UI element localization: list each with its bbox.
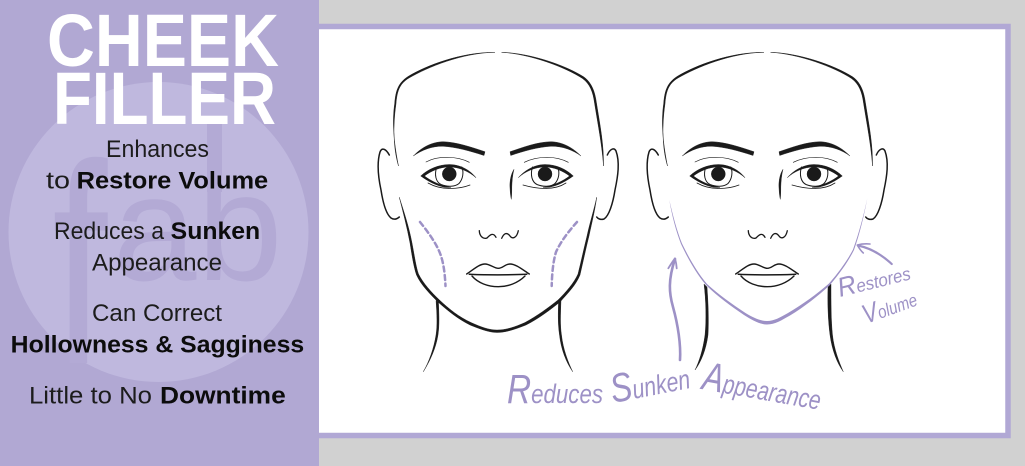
- text: hollowness and sagginess: Can Correct: [92, 300, 222, 327]
- text: sunken appearance: Sunken: [171, 218, 260, 245]
- heading: cheek filler: CHEEK: [47, 0, 279, 82]
- arrow: to sunken area: [668, 258, 680, 360]
- label: restores volume: Restores: [834, 256, 913, 303]
- label: reduces sunken appearance: Sunken: [606, 351, 693, 412]
- text: hollowness and sagginess: Hollowness & Sagginess: [11, 332, 304, 359]
- head outline: [647, 52, 887, 372]
- text: sunken appearance: [54, 218, 260, 277]
- dashed guide: left cheek hollow: [420, 222, 446, 286]
- illustration: face before treatment: [378, 52, 618, 372]
- dashed guide: right cheek hollow: [552, 222, 577, 286]
- eyebrows: [682, 142, 850, 162]
- text: restore volume: Restore Volume: [77, 168, 268, 195]
- head outline: [378, 52, 618, 372]
- text: restore volume: [46, 136, 268, 195]
- lips: [736, 264, 798, 287]
- watermark: fab logo: b: [197, 141, 283, 313]
- label: reduces sunken appearance: Reduces: [507, 366, 603, 412]
- restored jawline: [669, 198, 867, 324]
- text: sunken appearance: Reduces a: [54, 218, 165, 245]
- text: restore volume: Enhances: [106, 136, 209, 163]
- eyes: [690, 164, 842, 188]
- eyebrows: [413, 142, 581, 162]
- text: sunken appearance: Appearance: [92, 250, 222, 277]
- nose: [479, 169, 518, 238]
- panel: illustration frame: [316, 26, 1008, 436]
- lips: [467, 264, 529, 287]
- watermark: fab logo: a: [113, 144, 197, 312]
- text: downtime: [29, 382, 286, 409]
- text: hollowness and sagginess: [11, 300, 304, 359]
- text: downtime: Downtime: [160, 382, 286, 409]
- label: reduces sunken appearance: Appearance: [698, 352, 826, 419]
- label: reduces sunken appearance: [507, 351, 826, 419]
- illustration: face after treatment: [647, 52, 887, 372]
- text: restore volume: to: [46, 168, 70, 195]
- eyes: [421, 164, 573, 188]
- label: restores volume: [834, 256, 921, 330]
- arrow: to restored volume: [857, 244, 892, 264]
- heading: cheek filler: FILLER: [53, 57, 276, 140]
- text: downtime: Little to No: [29, 382, 152, 409]
- heading: cheek filler: [47, 0, 279, 140]
- nose: [748, 169, 787, 238]
- watermark: fab logo: [8, 82, 308, 424]
- panel: left sidebar: [0, 0, 319, 466]
- label: restores volume: Volume: [858, 282, 921, 330]
- watermark: fab logo: f: [52, 106, 108, 424]
